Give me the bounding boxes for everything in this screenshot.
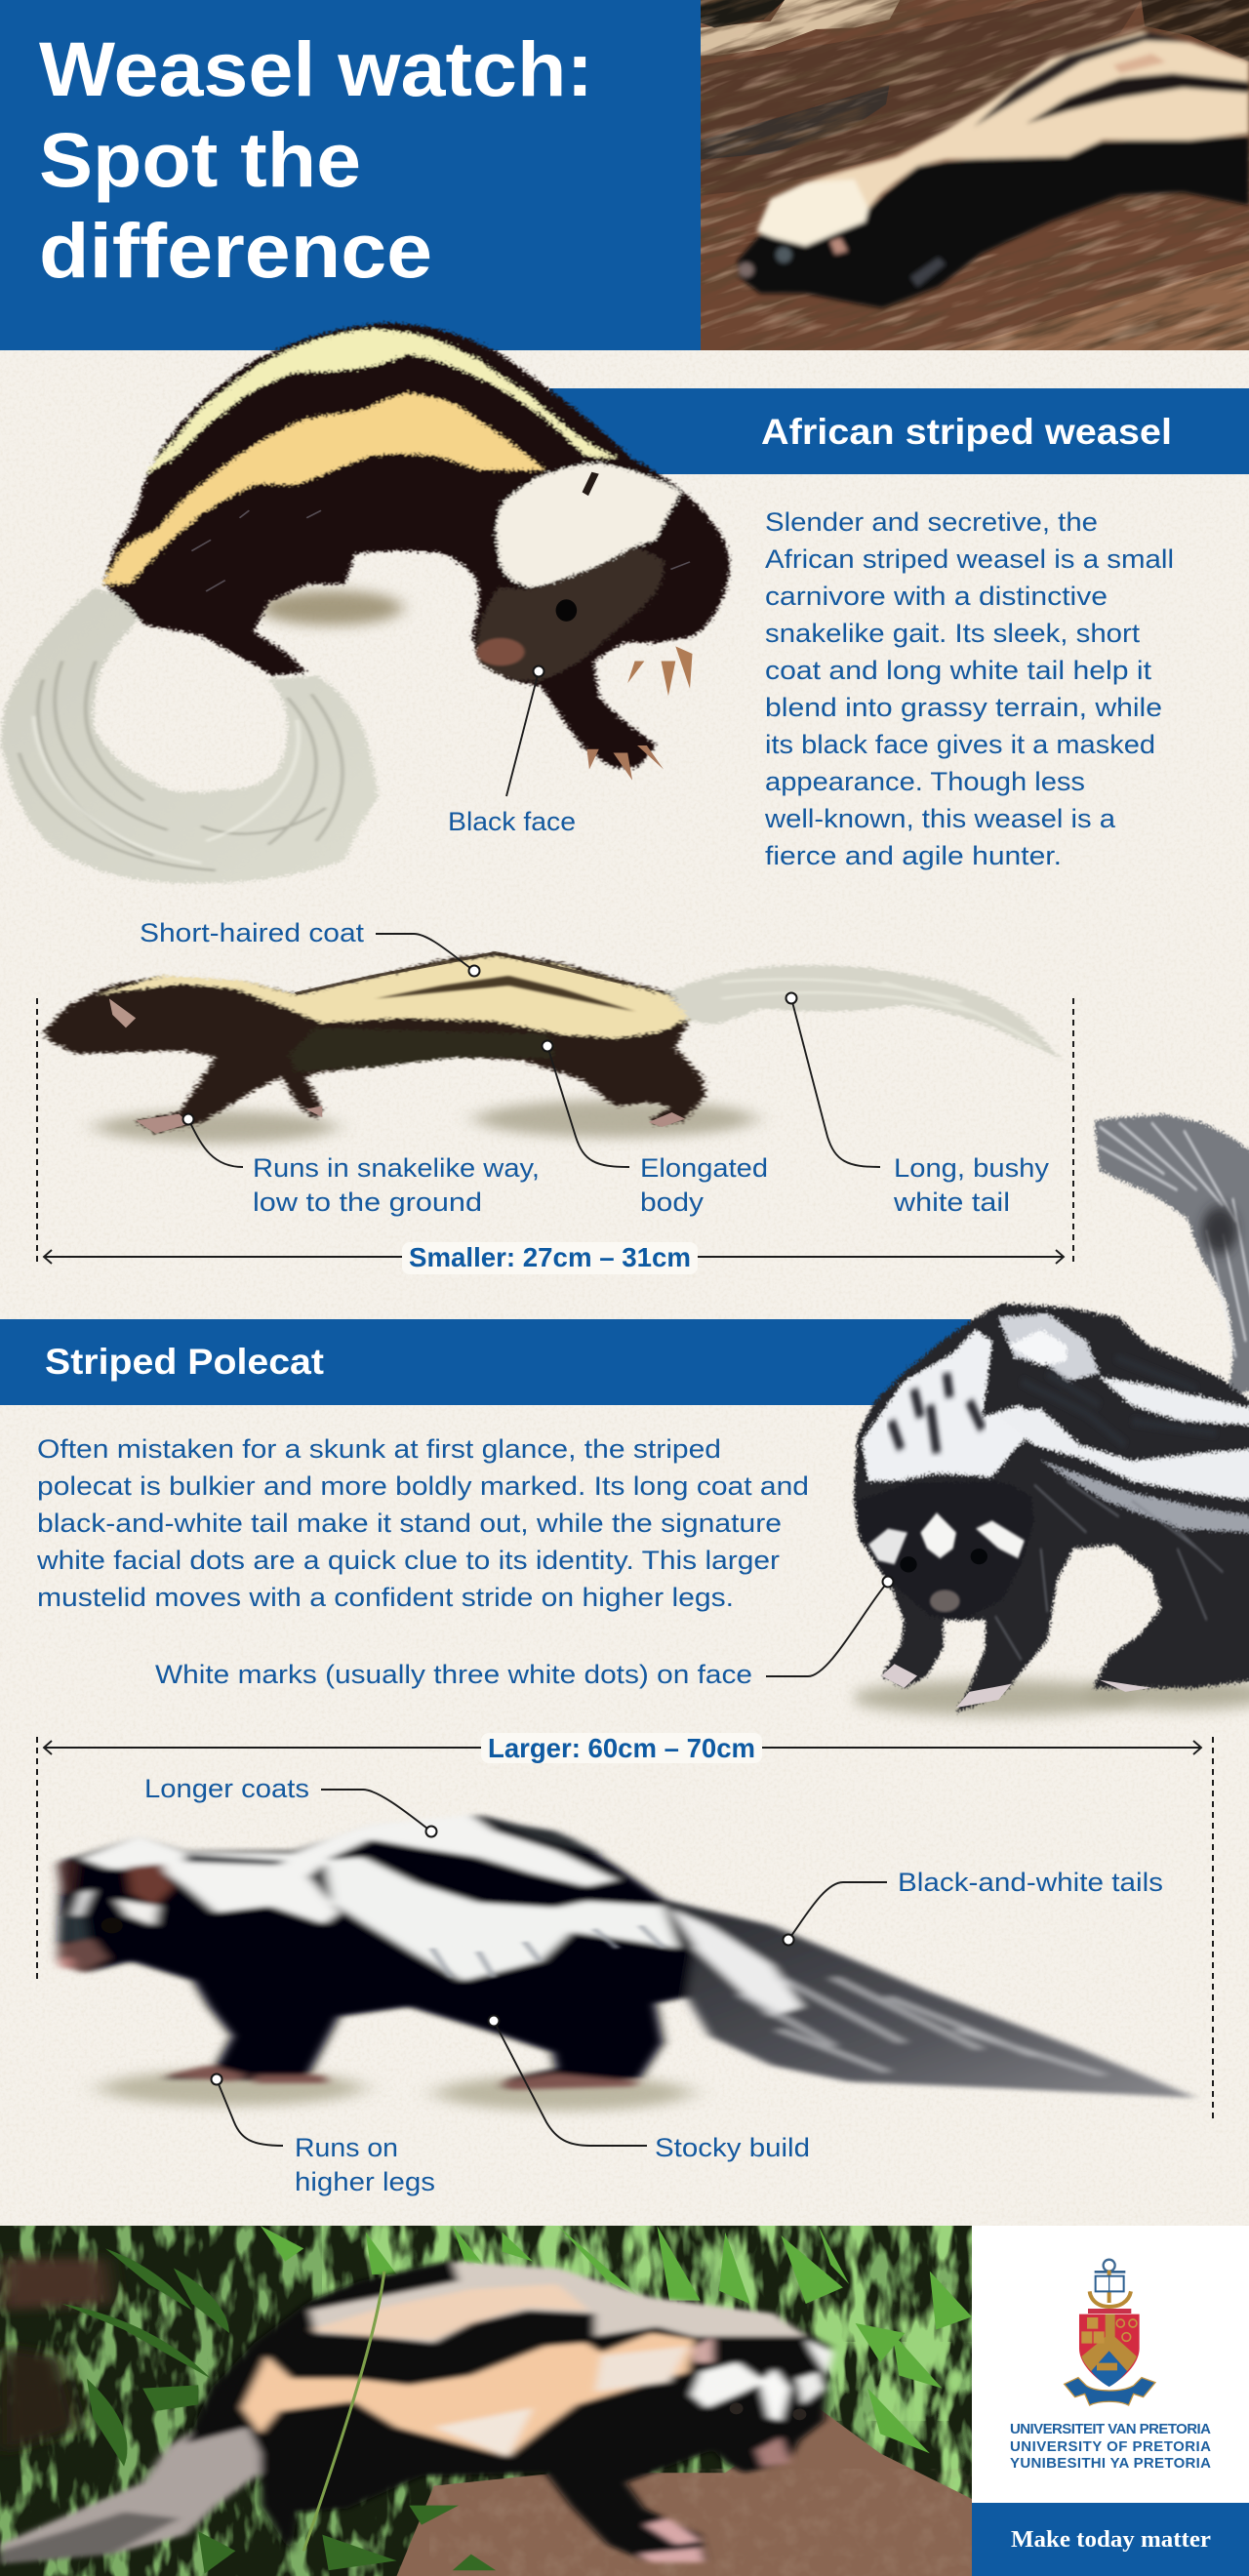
title bbox=[39, 25, 593, 294]
illustration: large African striped weasel bbox=[1, 323, 729, 883]
title: Weasel watch: bbox=[39, 25, 593, 112]
text block: African striped weasel description: appearance. Though less bbox=[765, 767, 1085, 796]
callout: elongated body: body bbox=[640, 1187, 705, 1217]
callout: runs in snakelike way: Runs in snakelike way, bbox=[253, 1153, 540, 1183]
heading band: Striped Polecat bbox=[0, 1319, 971, 1405]
university name bbox=[1010, 2421, 1211, 2472]
callout: longer coats: Longer coats bbox=[144, 1774, 309, 1803]
text block: African striped weasel description: coat and long white tail help it bbox=[765, 656, 1152, 685]
callout: black-and-white tails bbox=[783, 1868, 1163, 1946]
text block: African striped weasel description: well-known, this weasel is a bbox=[764, 804, 1116, 833]
size scale: larger: Larger: 60cm – 70cm bbox=[488, 1733, 755, 1763]
size scale: smaller: Smaller: 27cm – 31cm bbox=[409, 1242, 691, 1272]
callout: runs in snakelike way: low to the ground bbox=[253, 1187, 482, 1217]
callout: short-haired coat bbox=[140, 918, 480, 976]
illustration: striped polecat side view bbox=[58, 1815, 1196, 2111]
callout: runs on higher legs bbox=[211, 2074, 435, 2196]
tagline bar: Make today matter bbox=[1011, 2527, 1211, 2553]
callout: stocky build: Stocky build bbox=[655, 2133, 810, 2162]
logo panel bbox=[972, 2226, 1249, 2503]
university name: YUNIBESITHI YA PRETORIA bbox=[1010, 2455, 1211, 2472]
text block: striped polecat description: polecat is bulkier and more boldly marked. Its long coat and bbox=[37, 1471, 809, 1501]
callout: white marks on face bbox=[155, 1577, 894, 1689]
heading band: African striped weasel: African striped weasel bbox=[761, 412, 1172, 452]
heading band: African striped weasel bbox=[549, 388, 1249, 474]
callout: white marks on face: White marks (usually three white dots) on face bbox=[155, 1660, 752, 1689]
callout: long bushy white tail: white tail bbox=[893, 1187, 1010, 1217]
title: difference bbox=[39, 207, 432, 294]
text block: striped polecat description bbox=[36, 1434, 809, 1612]
size scale: larger bbox=[37, 1733, 1213, 2122]
callout: runs in snakelike way bbox=[183, 1114, 540, 1217]
callout: longer coats bbox=[144, 1774, 437, 1836]
text block: striped polecat description: white facial dots are a quick clue to its identity. This larger bbox=[36, 1546, 780, 1575]
text block: African striped weasel description: fierce and agile hunter. bbox=[765, 841, 1062, 870]
callout: elongated body bbox=[543, 1040, 768, 1217]
text block: African striped weasel description: African striped weasel is a small bbox=[765, 544, 1174, 574]
title: Spot the bbox=[39, 116, 361, 203]
size scale: smaller bbox=[37, 998, 1073, 1274]
text block: striped polecat description: Often mistaken for a skunk at first glance, the striped bbox=[37, 1434, 721, 1464]
callout: stocky build bbox=[488, 2016, 810, 2162]
text block: African striped weasel description: snakelike gait. Its sleek, short bbox=[765, 619, 1141, 648]
text block: striped polecat description: mustelid moves with a confident stride on higher legs. bbox=[37, 1583, 734, 1612]
illustration: side view African striped weasel bbox=[44, 953, 1062, 1144]
callout: black-and-white tails: Black-and-white tails bbox=[898, 1868, 1163, 1897]
callout: elongated body: Elongated bbox=[640, 1153, 768, 1183]
callout: long bushy white tail bbox=[786, 993, 1050, 1217]
photo: striped polecat in grass bbox=[0, 2226, 972, 2576]
university name: UNIVERSITEIT VAN PRETORIA bbox=[1010, 2421, 1211, 2437]
university name: UNIVERSITY OF PRETORIA bbox=[1010, 2438, 1211, 2455]
callout: short-haired coat: Short-haired coat bbox=[140, 918, 365, 947]
callout: runs on higher legs: higher legs bbox=[295, 2167, 435, 2196]
callout: black face bbox=[448, 665, 576, 836]
callout: runs on higher legs: Runs on bbox=[295, 2133, 398, 2162]
callout: long bushy white tail: Long, bushy bbox=[894, 1153, 1050, 1183]
illustration: striped polecat front view bbox=[852, 1114, 1249, 1715]
text block: African striped weasel description: carnivore with a distinctive bbox=[765, 582, 1108, 611]
text block: African striped weasel description: Slender and secretive, the bbox=[765, 507, 1098, 537]
text block: African striped weasel description: its black face gives it a masked bbox=[765, 730, 1155, 759]
university crest bbox=[1065, 2260, 1155, 2405]
text block: African striped weasel description: blend into grassy terrain, while bbox=[765, 693, 1162, 722]
title panel bbox=[0, 0, 701, 350]
tagline bar bbox=[972, 2503, 1249, 2576]
heading band: Striped Polecat: Striped Polecat bbox=[45, 1342, 324, 1382]
text block: striped polecat description: black-and-white tail make it stand out, while the signature bbox=[37, 1509, 782, 1538]
callout: black face: Black face bbox=[448, 807, 576, 836]
photo: weasel on bark bbox=[701, 0, 1249, 350]
text block: African striped weasel description bbox=[764, 507, 1174, 870]
